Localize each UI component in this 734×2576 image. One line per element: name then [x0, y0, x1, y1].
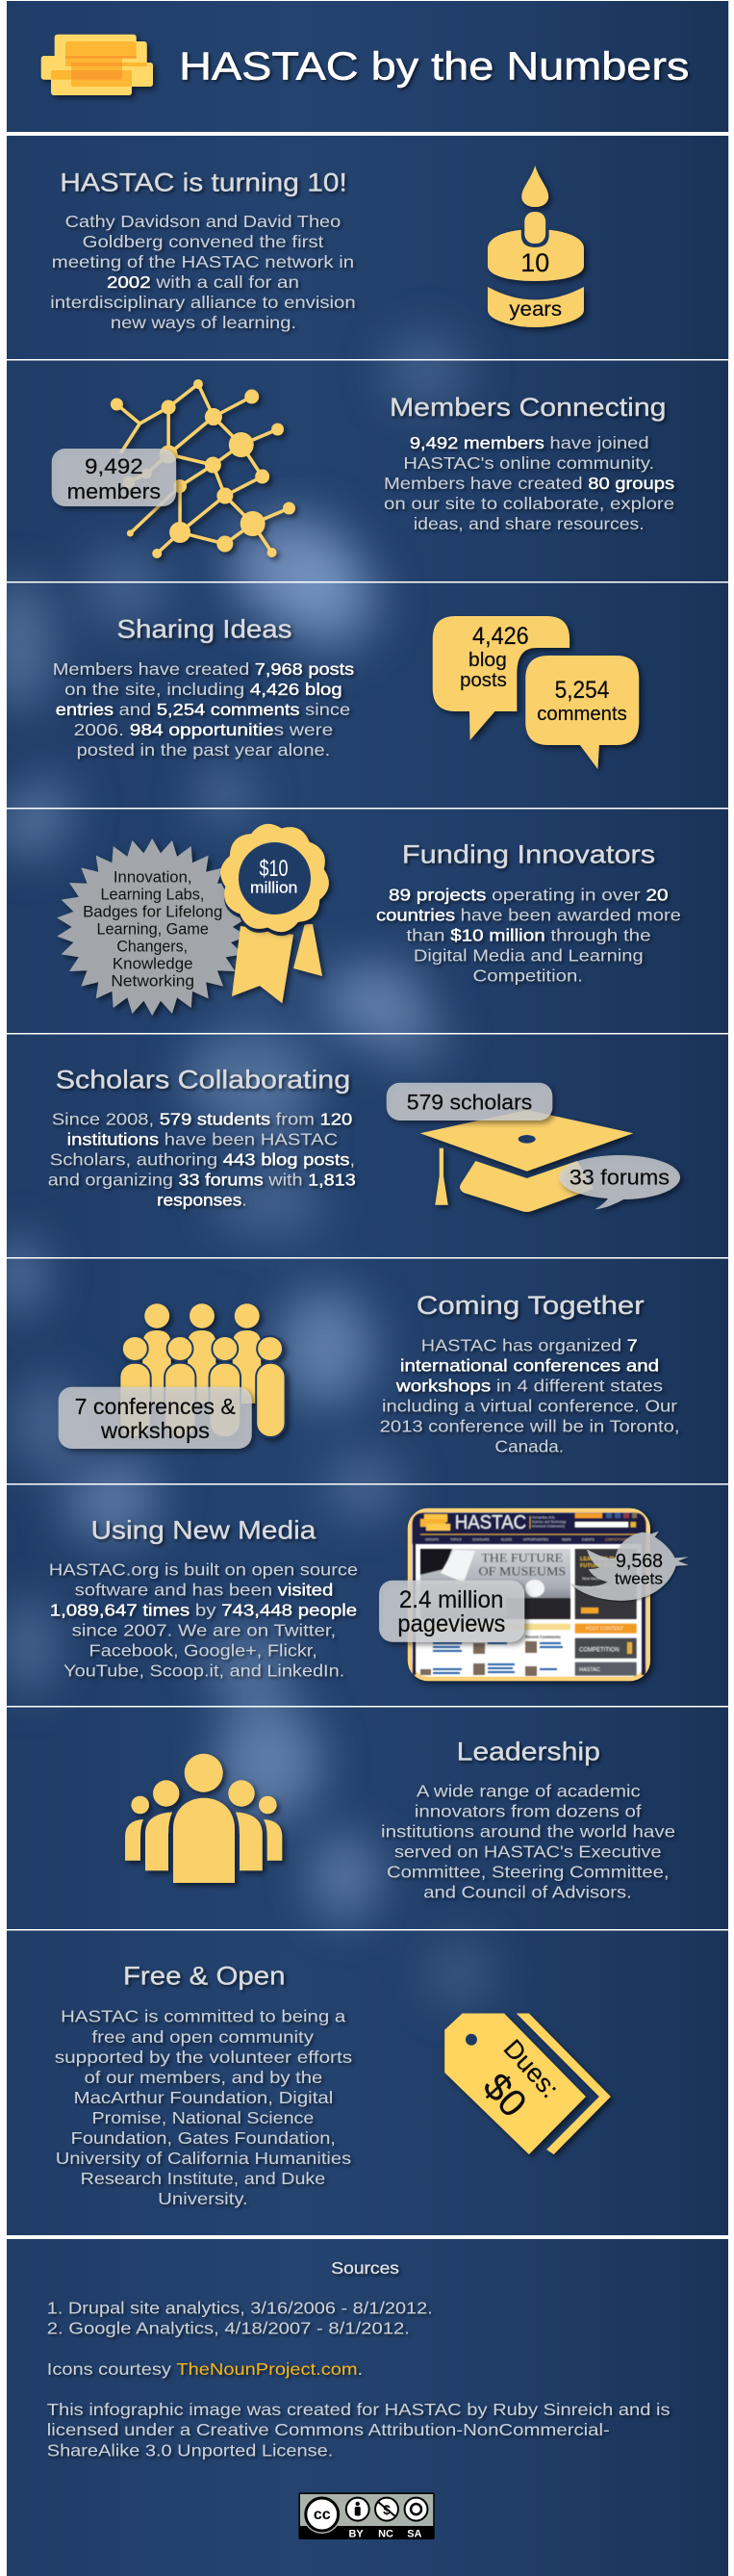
icon: graduation cap	[420, 1110, 633, 1212]
text block: Members have created 80 groups	[384, 474, 674, 493]
text block: interdisciplinary alliance to envision	[50, 293, 356, 312]
text block: new ways of learning.	[111, 313, 296, 332]
icon: HASTAC logo	[41, 35, 153, 95]
website screenshot: OPPORTUNITIES	[523, 1538, 548, 1541]
text block: citations: This infographic image was created for HASTAC by Ruby Sinreich and is	[47, 2400, 671, 2419]
panel: Sharing Ideas	[6, 406, 729, 1483]
text block: international conferences and	[400, 1355, 659, 1375]
icon: price tag	[444, 2014, 611, 2154]
panel: Free and Open	[6, 1931, 729, 2576]
text block: institutions around the world have	[381, 1822, 675, 1842]
text block: citations: 1. Drupal site analytics, 3/16/2006 - 8/1/2012.	[47, 2299, 433, 2318]
callout: 2.4 million pageviews: 2.4 million	[399, 1586, 503, 1613]
text block: Scholars, authoring 443 blog posts ,	[50, 1150, 355, 1170]
text block: entries and 5,254 comments since	[56, 700, 350, 719]
text block	[384, 433, 674, 533]
website screenshot: HASTAC	[455, 1512, 526, 1533]
website screenshot: NEWS	[562, 1538, 571, 1541]
text block: citations: licensed under a Creative Commons Attribution-NonCommercial-	[47, 2420, 610, 2439]
panel: Members Connecting	[6, 167, 729, 808]
text block: and Council of Advisors.	[423, 1883, 632, 1902]
icon: leader with team	[125, 1754, 282, 1883]
text block: YouTube, Scoop.it, and LinkedIn.	[63, 1662, 344, 1681]
website screenshot: THE FUTURE	[481, 1552, 564, 1565]
callout: 9,568 tweets bird: tweets	[615, 1570, 663, 1588]
panel: Using New Media	[6, 1330, 729, 2576]
callout: 579 scholars: 579 scholars	[407, 1091, 532, 1115]
text block: Since 2008, 579 students from 120	[52, 1110, 353, 1129]
text block: University of California Humanities	[56, 2149, 351, 2168]
text block: than $10 million through the	[406, 926, 651, 945]
starburst with program list: Knowledge	[113, 955, 192, 973]
text block: Committee, Steering Committee,	[387, 1863, 670, 1882]
icon: blog posts speech bubble: blog	[468, 650, 507, 671]
text block: citations: Icons courtesy TheNounProject.com .	[47, 2359, 363, 2379]
text block: and organizing 33 forums with 1,813	[48, 1171, 356, 1190]
text block: 9,492 members have joined	[410, 433, 649, 452]
text block	[381, 1782, 675, 1902]
icon: award ribbon	[220, 824, 329, 1003]
website screenshot	[410, 1510, 648, 1679]
text block: Digital Media and Learning	[414, 946, 644, 966]
website screenshot: EVENTS	[582, 1538, 595, 1541]
text block	[380, 1335, 679, 1455]
icon: blog posts speech bubble: posts	[460, 670, 507, 691]
starburst with program list: Learning Labs,	[100, 886, 204, 904]
text block: citations: ShareAlike 3.0 Unported License.	[47, 2440, 333, 2460]
callout: 7 conferences & workshops	[59, 1387, 252, 1449]
title: HASTAC by the Numbers	[179, 43, 689, 89]
website screenshot: Humanities, Arts,	[532, 1515, 555, 1519]
text block: institutions have been HASTAC	[67, 1130, 338, 1149]
text block	[53, 659, 354, 760]
text block: innovators from dozens of	[415, 1802, 642, 1821]
text block: HASTAC has organized 7	[421, 1335, 638, 1354]
starburst with program list: Changers,	[116, 938, 188, 956]
text block: 2006. 984 opportunitie s were	[74, 720, 333, 739]
icon: network graph	[111, 379, 295, 558]
icon: price tag: $0	[475, 2065, 535, 2125]
icon: award ribbon: $10	[260, 856, 289, 882]
website screenshot: POST CONTENT	[586, 1627, 623, 1633]
icon: blog posts speech bubble	[433, 616, 569, 740]
icon: group of people	[119, 1303, 286, 1437]
icon: award ribbon: million	[250, 879, 297, 897]
panel: HASTAC is turning 10	[6, 136, 729, 581]
website screenshot: GROUPS	[425, 1538, 439, 1541]
text block: HASTAC's online community.	[403, 453, 654, 473]
website screenshot: COMPETITIONS	[605, 1538, 628, 1541]
heading: Funding Innovators	[402, 840, 655, 869]
text block: A wide range of academic	[417, 1782, 641, 1801]
heading: Free & Open	[123, 1962, 286, 1991]
starburst with program list	[57, 838, 247, 1016]
callout: 33 forums: 33 forums	[569, 1166, 670, 1190]
panel: Funding Innovators	[6, 656, 729, 1483]
icon: price tag: Dues:	[498, 2034, 565, 2103]
text block: Members have created 7,968 posts	[53, 659, 354, 679]
icon: birthday cake: years	[509, 298, 562, 321]
text block: countries have been awarded more	[376, 906, 681, 925]
text block: free and open community	[92, 2027, 314, 2047]
heading: Sources: Sources	[331, 2258, 399, 2278]
website screenshot: Recent Comments	[525, 1635, 561, 1639]
icon: comments speech bubble: 5,254	[555, 677, 609, 704]
text block: 2013 conference will be in Toronto,	[380, 1416, 679, 1435]
callout: 7 conferences & workshops: 7 conferences &	[75, 1394, 236, 1419]
icon: Creative Commons badge: cc	[314, 2507, 331, 2523]
heading: Leadership	[457, 1737, 600, 1765]
text block	[376, 886, 681, 986]
icon: comments speech bubble: comments	[537, 704, 627, 725]
website screenshot: New Ideas	[582, 1576, 600, 1581]
callout: 2.4 million pageviews	[379, 1581, 524, 1642]
text block: MacArthur Foundation, Digital	[74, 2088, 333, 2107]
text block: HASTAC is committed to being a	[61, 2007, 346, 2026]
panel: Scholars Collaborating	[6, 1034, 729, 1483]
text block: Foundation, Gates Foundation,	[71, 2128, 336, 2148]
text block: Promise, National Science	[92, 2108, 314, 2127]
text block: University.	[158, 2189, 248, 2208]
heading: HASTAC is turning 10!	[60, 167, 347, 196]
text block: of our members, and by the	[85, 2068, 322, 2087]
text block: Research Institute, and Duke	[81, 2169, 325, 2188]
text block: 2002 with a call for an	[107, 272, 299, 292]
website screenshot: Critical Thinking	[582, 1584, 609, 1589]
heading: Coming Together	[417, 1291, 645, 1320]
website screenshot: BLOGS	[501, 1538, 512, 1541]
text block: responses .	[157, 1191, 247, 1210]
callout: 2.4 million pageviews: pageviews	[397, 1610, 505, 1637]
website screenshot: SCHOLARS	[472, 1538, 490, 1541]
callout: 9,568 tweets bird	[570, 1532, 689, 1601]
callout: 9,492 members: members	[67, 479, 161, 503]
panel: Leadership	[6, 1537, 729, 2576]
text block: including a virtual conference. Our	[382, 1396, 677, 1415]
panel: Sources	[7, 2239, 728, 2576]
website screenshot: OF MUSEUMS	[479, 1565, 566, 1579]
icon: birthday cake	[488, 166, 584, 327]
starburst with program list: Badges for Lifelong	[83, 903, 222, 921]
heading: Using New Media	[91, 1515, 316, 1544]
callout: 9,492 members: 9,492	[85, 454, 143, 478]
panel: Coming Together	[6, 1259, 729, 1706]
text block	[50, 212, 356, 332]
icon: Creative Commons badge	[298, 2492, 435, 2540]
heading: Scholars Collaborating	[56, 1066, 350, 1095]
text block: Competition.	[473, 966, 583, 986]
text block: 1,089,647 times by 743,448 people	[50, 1601, 357, 1620]
text block: Canada.	[494, 1436, 564, 1455]
text block: workshops in 4 different states	[395, 1376, 663, 1395]
text block	[48, 1110, 356, 1210]
text block	[49, 1560, 358, 1681]
callout: 579 scholars	[387, 1083, 552, 1121]
icon: birthday cake: 10	[520, 248, 549, 277]
text block: served on HASTAC's Executive	[394, 1842, 662, 1862]
icon: Creative Commons badge: $	[383, 2502, 391, 2517]
text block: supported by the volunteer efforts	[55, 2048, 352, 2067]
website screenshot: Advanced Collaboratory	[532, 1525, 565, 1529]
text block	[55, 2007, 352, 2208]
icon: Creative Commons badge: NC	[378, 2529, 393, 2540]
website screenshot: COMPETITION	[579, 1648, 620, 1654]
website screenshot: Science, and Technology	[532, 1520, 567, 1524]
text block: Cathy Davidson and David Theo	[65, 212, 341, 231]
text block: Facebook, Google+, Flickr,	[89, 1641, 317, 1661]
text block: meeting of the HASTAC network in	[52, 252, 354, 271]
text block: ideas, and share resources.	[414, 514, 645, 533]
heading: Members Connecting	[390, 393, 667, 422]
website screenshot: TOPICS	[450, 1538, 462, 1541]
heading: Sharing Ideas	[116, 615, 291, 644]
icon: comments speech bubble	[525, 656, 639, 769]
text block: Goldberg convened the first	[83, 232, 323, 251]
icon: blog posts speech bubble: 4,426	[472, 623, 529, 650]
callout: 33 forums	[559, 1155, 680, 1209]
icon: Creative Commons badge: SA	[407, 2529, 422, 2540]
text block: software and has been visited	[75, 1581, 333, 1600]
text block: citations	[47, 2299, 671, 2460]
callout: 9,492 members	[52, 449, 176, 506]
text block: since 2007. We are on Twitter,	[72, 1621, 336, 1640]
website screenshot: FUTURE TODAY	[580, 1563, 621, 1569]
text block: citations: 2. Google Analytics, 4/18/2007 - 8/1/2012.	[47, 2318, 410, 2337]
text block: on our site to collaborate, explore	[384, 494, 674, 513]
callout: 7 conferences & workshops: workshops	[100, 1418, 210, 1443]
website screenshot: LEARNING THE	[580, 1557, 620, 1562]
text block: on the site, including 4,426 blog	[64, 680, 342, 699]
starburst with program list: Learning, Game	[96, 920, 209, 939]
panel: header	[7, 1, 728, 132]
icon: Creative Commons badge: BY	[349, 2529, 364, 2540]
text block: 89 projects operating in over 20	[389, 886, 669, 905]
text block: HASTAC.org is built on open source	[49, 1560, 358, 1580]
callout: 9,568 tweets bird: 9,568	[616, 1551, 663, 1572]
starburst with program list: Innovation,	[114, 868, 191, 887]
text block: posted in the past year alone.	[77, 740, 330, 760]
starburst with program list: Networking	[111, 972, 194, 991]
website screenshot: HASTAC	[579, 1667, 600, 1673]
